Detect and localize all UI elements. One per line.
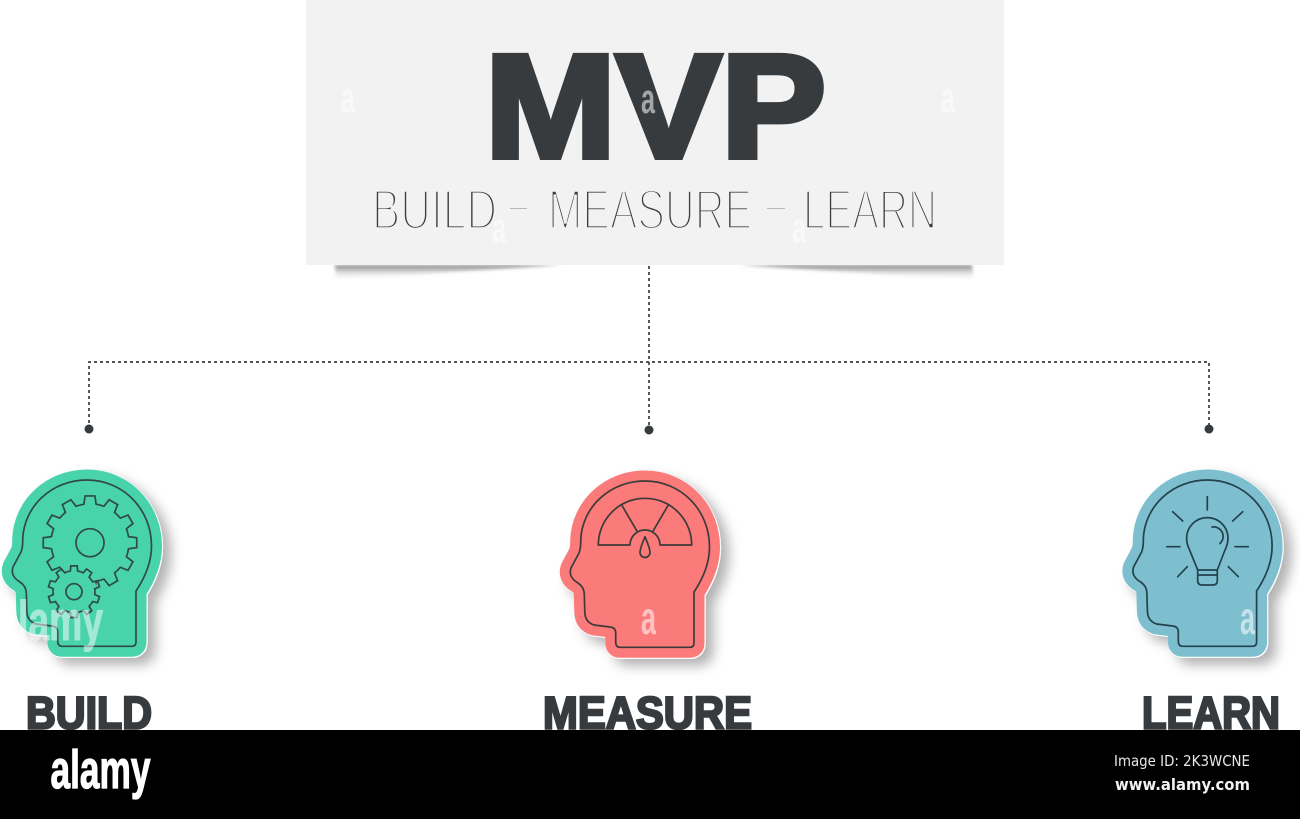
title: MVP: MVP — [485, 25, 826, 189]
watermarks on panel: a — [792, 204, 806, 251]
label: MEASURE: MEASURE — [543, 688, 752, 738]
watermark on learn head: a — [1240, 592, 1255, 644]
subtitle: MEASURE — [548, 178, 752, 242]
label: LEARN: LEARN — [1142, 688, 1280, 738]
dotted connector tree — [84, 266, 1214, 434]
subtitle: – — [509, 172, 528, 236]
footer bar — [0, 730, 1300, 819]
icon: measure head with gauge — [570, 481, 710, 648]
image id: Image ID: 2K3WCNE — [1114, 752, 1250, 770]
watermark on measure head: a — [641, 592, 656, 644]
subtitle: BUILD — [372, 178, 497, 242]
label: BUILD: BUILD — [26, 688, 152, 738]
watermark on title: a — [641, 75, 655, 122]
watermarks on panel: a — [341, 74, 355, 121]
gauge dial — [598, 498, 692, 558]
icon: build head with gears — [12, 480, 152, 652]
watermarks on panel — [341, 74, 955, 251]
subtitle: LEARN — [803, 178, 937, 242]
alamy logo: alamy — [50, 740, 150, 800]
large gear — [43, 496, 137, 589]
icon: learn head with light bulb — [1133, 480, 1273, 647]
watermarks on panel: a — [941, 74, 955, 121]
title panel — [306, 0, 1004, 265]
light bulb — [1167, 497, 1248, 585]
small gear — [47, 566, 101, 618]
website: www.alamy.com — [1115, 775, 1250, 794]
watermark on build head: lamy — [18, 589, 103, 652]
paper shadow under title panel — [335, 265, 974, 280]
subtitle: – — [766, 172, 786, 236]
subtitle — [372, 172, 937, 242]
watermarks on panel: a — [492, 204, 506, 251]
